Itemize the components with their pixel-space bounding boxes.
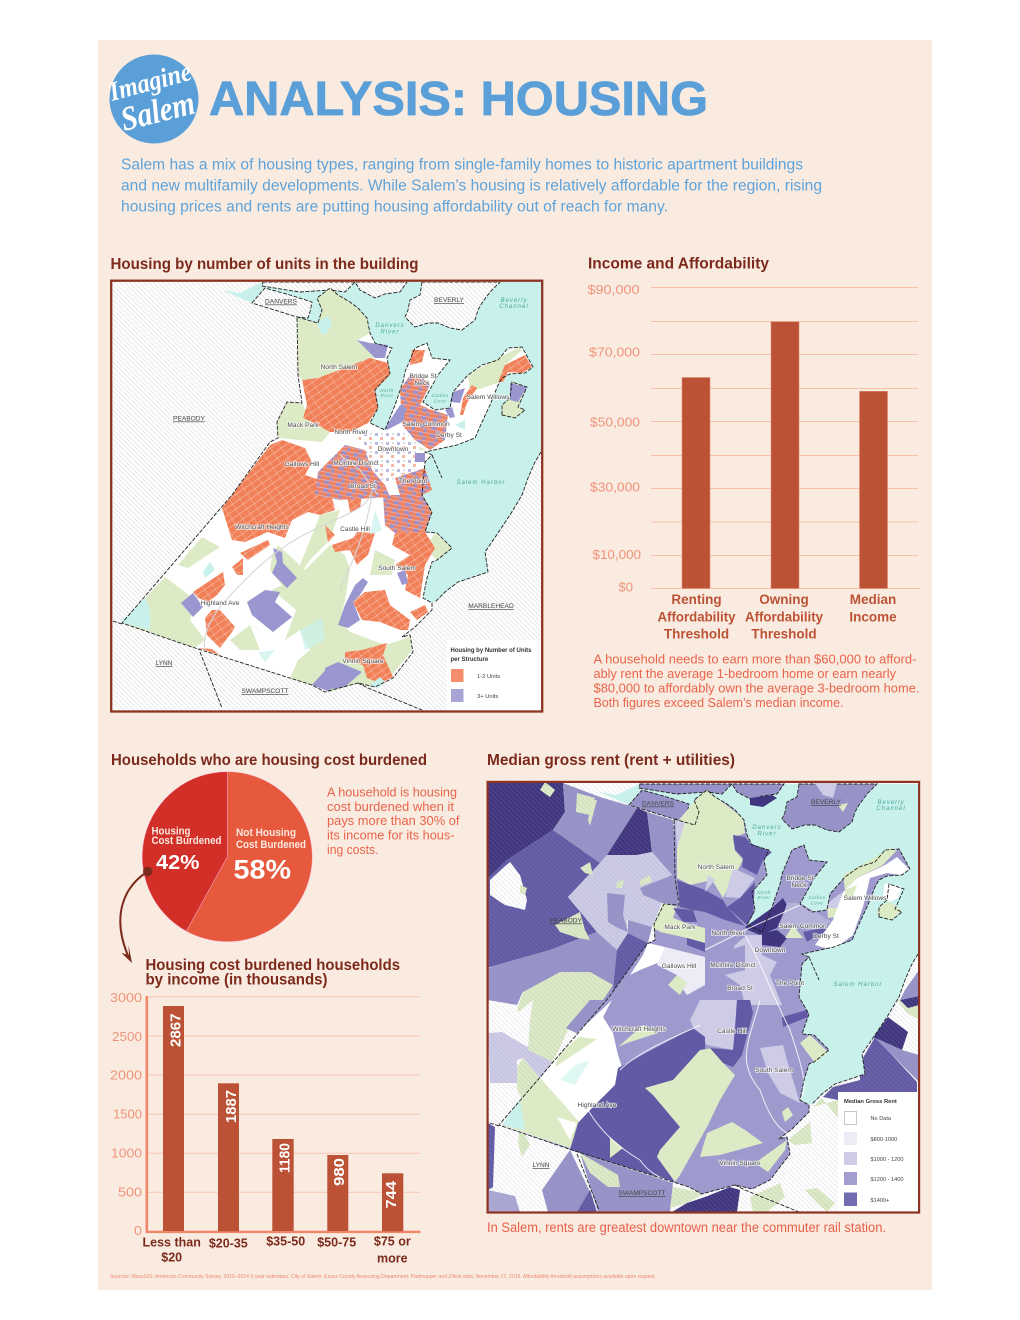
- heading: cost burdened: Households who are housing cost burdened: [111, 752, 427, 769]
- y axis labels: 2500: [112, 1030, 142, 1044]
- place labels: North Salem: [321, 364, 358, 371]
- place labels: Broad St: [350, 483, 376, 490]
- place labels: Beverly: [500, 298, 528, 304]
- place labels: Salem Harbor: [833, 982, 883, 988]
- y axis labels: 1500: [113, 1108, 142, 1122]
- place labels: McIntire District: [710, 962, 756, 969]
- place labels: Mack Park: [664, 924, 696, 931]
- rent zones: [499, 783, 910, 1182]
- heading: burdened by income: by income (in thousands): [146, 972, 328, 988]
- sparse downtown: [355, 430, 420, 485]
- place labels: North: [757, 890, 771, 895]
- place labels: Neck: [414, 380, 430, 387]
- place labels: River: [757, 832, 777, 838]
- pie chart: 58%: [234, 854, 291, 884]
- legend: units: Housing by Number of Units: [450, 648, 532, 654]
- heading: units map: Housing by number of units in the building: [110, 256, 418, 273]
- text: burden definition: cost burdened when it: [327, 799, 454, 814]
- category labels: Less than: [143, 1236, 201, 1250]
- place labels: McIntire District: [333, 460, 379, 467]
- place labels: PEABODY: [173, 416, 206, 422]
- place labels: Witchcraft Heights: [612, 1026, 666, 1033]
- caption: rent map: In Salem, rents are greatest downtown near the commuter rail station.: [487, 1220, 886, 1235]
- place labels: Channel: [499, 304, 529, 310]
- legend: units: [447, 640, 542, 711]
- y axis labels: 500: [118, 1186, 142, 1200]
- logo: Imagine Salem: Salem: [117, 85, 199, 139]
- title: ANALYSIS: HOUSING: [209, 73, 708, 126]
- 3+ unit parcels: [181, 340, 527, 692]
- text: affordability note: $80,000 to affordably own the average 3-bedroom home.: [594, 681, 920, 696]
- legend: rent: $800-1000: [870, 1137, 897, 1143]
- y axis labels: 1000: [111, 1146, 142, 1160]
- place labels: [532, 799, 906, 1197]
- y axis labels: $30,000: [590, 480, 640, 494]
- infographic: [98, 40, 932, 1290]
- place labels: North: [380, 388, 394, 393]
- bar labels: Renting: [671, 592, 722, 607]
- place labels: Gallows Hill: [662, 963, 697, 970]
- small water bodies and inlet: [120, 316, 465, 688]
- legend: rent: Median Gross Rent: [844, 1099, 897, 1105]
- heading: rent map: Median gross rent (rent + utilities): [487, 752, 735, 769]
- y axis labels: $70,000: [589, 346, 640, 360]
- bar labels: Median: [850, 592, 896, 607]
- place labels: PEABODY: [550, 918, 583, 924]
- boundaries: [490, 790, 918, 1212]
- bars: [163, 1006, 403, 1231]
- place labels: LYNN: [532, 1162, 550, 1169]
- place labels: Danvers: [375, 323, 405, 329]
- chart: burdened households by income: [110, 991, 420, 1266]
- mixed parcels: [315, 375, 448, 533]
- text: burden definition: its income for its hous-: [327, 828, 454, 843]
- place labels: Mack Park: [287, 422, 319, 429]
- text: affordability note: A household needs to earn more than $60,000 to afford-: [594, 652, 916, 666]
- place labels: SWAMPSCOTT: [618, 1190, 666, 1197]
- roads: [588, 905, 804, 1185]
- place labels: Salem Willows: [844, 895, 887, 902]
- place labels: Castle Hill: [340, 526, 370, 533]
- y axis labels: 3000: [110, 991, 142, 1005]
- y axis labels: $90,000: [588, 283, 640, 297]
- place labels: Derby St: [813, 933, 839, 940]
- bar labels: Income: [849, 610, 897, 624]
- place labels: Collins: [808, 895, 826, 900]
- y axis labels: $50,000: [590, 416, 640, 430]
- place labels: Salem Willows: [467, 394, 510, 401]
- category labels: $20-35: [209, 1236, 248, 1250]
- bar values: 744: [383, 1180, 400, 1208]
- bar values: 2867: [168, 1014, 184, 1047]
- legend: rent: $1000 - 1200: [870, 1157, 903, 1163]
- sources: Sources: MassGIS; American Community Survey, 2010–2014 5-year estimates; City of Salem; Essex County Assessing Department; Padmapper and Zillow data, November 17, 2016. Affordability threshold assumptions available upon request.: [110, 1274, 656, 1280]
- map: housing by number of units: [111, 281, 542, 712]
- green space: [122, 288, 527, 692]
- place labels: The Point: [776, 980, 804, 987]
- roads: [204, 455, 378, 650]
- place labels: [155, 297, 529, 695]
- place labels: Downtown: [378, 446, 409, 453]
- intro text: Salem has a mix of housing types, ranging from single-family homes to historic apartment buildings: [121, 156, 803, 174]
- boundaries: [113, 288, 533, 710]
- place labels: Salem Common: [402, 421, 450, 428]
- y axis labels: $0: [618, 580, 633, 594]
- category labels: $75 or: [374, 1235, 411, 1249]
- legend: units: 1-2 Units: [477, 674, 500, 680]
- place labels: Channel: [876, 806, 906, 812]
- place labels: Derby St: [436, 432, 462, 439]
- place labels: River: [380, 330, 400, 336]
- pie chart: Cost Burdened: [152, 835, 222, 847]
- logo: Imagine Salem: [105, 54, 199, 144]
- bar labels: Threshold: [664, 626, 729, 642]
- legend: rent: [838, 1092, 919, 1213]
- y axis labels: $10,000: [592, 548, 641, 562]
- place labels: Salem Common: [779, 923, 827, 930]
- bar labels: Affordability: [658, 610, 736, 624]
- place labels: Downtown: [755, 947, 786, 954]
- text: affordability note: ably rent the average 1-bedroom home or earn nearly: [594, 666, 896, 681]
- place labels: Bridge St: [409, 373, 437, 380]
- text: affordability note: Both figures exceed Salem’s median income.: [594, 695, 844, 710]
- logo: Imagine Salem: Imagine: [105, 56, 195, 107]
- text: burden definition: [327, 785, 460, 857]
- bars: [682, 322, 888, 588]
- place labels: Highland Ave: [201, 600, 240, 607]
- text: burden definition: ing costs.: [327, 842, 378, 857]
- place labels: North Salem: [698, 864, 735, 871]
- place labels: DANVERS: [265, 298, 298, 306]
- intro text: housing prices and rents are putting housing affordability out of reach for many.: [121, 198, 668, 216]
- place labels: Vinnin Square: [719, 1160, 761, 1167]
- place labels: Gallows Hill: [285, 461, 320, 468]
- y axis labels: [110, 991, 142, 1238]
- legend: rent: No Data: [870, 1116, 892, 1122]
- legend: rent: $1200 - 1400: [870, 1177, 903, 1183]
- pie chart: Cost Burdened: [236, 839, 306, 851]
- place labels: Beverly: [877, 800, 905, 806]
- text: affordability note: [594, 652, 920, 710]
- bar values: [168, 1014, 400, 1208]
- category labels: $35-50: [266, 1235, 305, 1249]
- place labels: South Salem: [378, 565, 416, 572]
- bar labels: [658, 592, 897, 642]
- place labels: North River: [711, 930, 745, 937]
- pie chart: Not Housing: [236, 827, 296, 839]
- legend: units: 3+ Units: [477, 694, 499, 700]
- heading: income chart: Income and Affordability: [588, 256, 769, 272]
- map: median gross rent: [488, 782, 919, 1213]
- place labels: Neck: [791, 882, 807, 889]
- pie chart: Housing: [152, 826, 190, 838]
- pie chart: 42%: [156, 852, 200, 874]
- pie chart: [142, 772, 312, 942]
- place labels: BEVERLY: [434, 297, 465, 304]
- category labels: more: [377, 1252, 408, 1266]
- intro text: [121, 156, 822, 216]
- surrounding towns: [488, 782, 919, 1212]
- bar labels: Threshold: [751, 626, 817, 642]
- place labels: Vinnin Square: [342, 658, 384, 665]
- place labels: River: [757, 895, 771, 900]
- text: burden definition: A household is housing: [327, 785, 457, 800]
- place labels: Highland Ave: [578, 1102, 617, 1109]
- place labels: Collins: [431, 393, 449, 398]
- place labels: MARBLEHEAD: [468, 603, 514, 610]
- category labels: $20: [161, 1251, 182, 1265]
- bar values: 1887: [223, 1090, 240, 1123]
- chart: income and affordability: [588, 283, 920, 642]
- y axis labels: 0: [134, 1224, 142, 1238]
- place labels: Danvers: [752, 825, 782, 831]
- place labels: Bridge St: [786, 875, 814, 882]
- place labels: Salem Harbor: [456, 480, 506, 486]
- y axis labels: [588, 283, 641, 594]
- category labels: $50-75: [317, 1236, 356, 1250]
- bar values: 1180: [276, 1143, 294, 1173]
- place labels: The Point: [399, 478, 427, 485]
- place labels: DANVERS: [642, 800, 675, 808]
- place labels: Cove: [811, 900, 823, 906]
- place labels: North River: [334, 429, 368, 436]
- legend: rent: $1400+: [870, 1198, 889, 1204]
- 1-2 unit parcels: [193, 350, 532, 683]
- category labels: [143, 1235, 411, 1266]
- page panel: [98, 40, 932, 1290]
- legend: units: per Structure: [450, 657, 489, 663]
- place labels: Cove: [434, 398, 446, 404]
- place labels: River: [380, 393, 394, 398]
- text: burden definition: pays more than 30% of: [327, 813, 460, 828]
- place labels: South Salem: [755, 1067, 793, 1074]
- bar values: 980: [331, 1158, 348, 1186]
- place labels: BEVERLY: [811, 799, 842, 806]
- intro text: and new multifamily developments. While Salem’s housing is relatively affordable for the region, rising: [121, 178, 822, 194]
- heading: burdened by income: [146, 957, 400, 988]
- bar labels: Owning: [759, 592, 809, 607]
- place labels: Witchcraft Heights: [235, 524, 289, 531]
- y axis labels: 2000: [110, 1068, 142, 1082]
- arrow: pie to bar chart: [120, 867, 152, 963]
- place labels: LYNN: [155, 660, 173, 667]
- bar labels: Affordability: [745, 610, 823, 624]
- place labels: Broad St: [727, 985, 753, 992]
- place labels: Castle Hill: [717, 1028, 747, 1035]
- place labels: SWAMPSCOTT: [241, 688, 289, 695]
- heading: burdened by income: Housing cost burdened households: [146, 957, 400, 974]
